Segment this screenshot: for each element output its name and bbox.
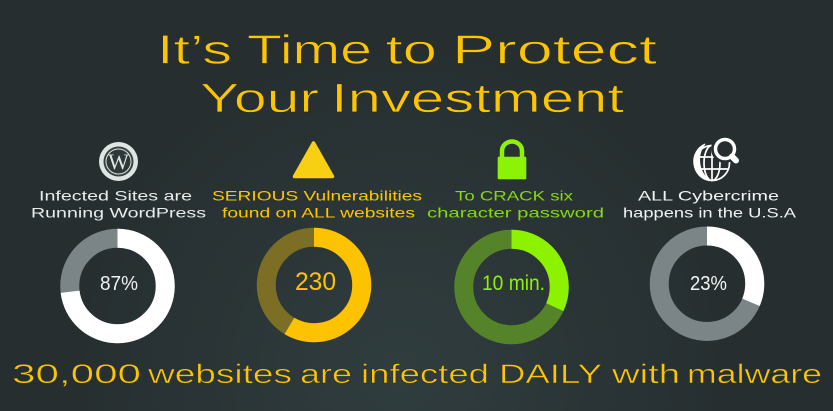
donut: 230: 230: [295, 268, 336, 296]
donut: 10 min.: 10 min.: [482, 272, 545, 295]
label: serious vulnerabilities: SERIOUS Vulnerabilities: [212, 188, 422, 204]
footer headline: websites: [147, 359, 292, 389]
icon: warning triangle: [294, 143, 332, 176]
footer headline: 30,000: [12, 359, 141, 389]
footer headline: malware: [687, 359, 822, 389]
label: serious vulnerabilities: found on ALL websites: [222, 204, 415, 220]
donut: 87%: 87%: [100, 273, 138, 295]
icon: wordpress: [99, 142, 138, 181]
label: all cybercrime: [623, 188, 797, 220]
donut: 230: [266, 237, 362, 333]
footer headline: DAILY: [499, 359, 602, 389]
label: all cybercrime: happens in the U.S.A: [623, 204, 797, 220]
label: crack password: [427, 188, 604, 220]
label: all cybercrime: ALL Cybercrime: [638, 188, 779, 204]
label: infected sites: [31, 188, 206, 220]
icon: wordpress: W: [108, 149, 129, 174]
label: infected sites: Running WordPress: [31, 204, 206, 220]
title: Time: [247, 26, 372, 72]
label: infected sites: Infected Sites are: [39, 188, 192, 204]
title: Investment: [331, 75, 625, 121]
donut: 23%: [659, 236, 755, 331]
title: Your: [200, 75, 319, 121]
title: [157, 26, 658, 121]
footer headline: infected: [361, 359, 489, 389]
title: Protect: [452, 26, 658, 72]
donut: 87%: [70, 238, 165, 334]
footer headline: with: [611, 359, 680, 389]
footer headline: are: [300, 359, 352, 389]
donut: 23%: 23%: [690, 273, 727, 295]
icon: globe with magnifier: [694, 135, 739, 180]
donut: 10 min.: [464, 239, 559, 335]
label: crack password: character password: [427, 204, 604, 220]
label: crack password: To CRACK six: [455, 188, 573, 204]
title: It’s: [157, 26, 232, 72]
footer headline: [12, 359, 822, 389]
icon: padlock: [498, 142, 526, 179]
label: serious vulnerabilities: [212, 188, 422, 220]
title: to: [386, 26, 437, 72]
